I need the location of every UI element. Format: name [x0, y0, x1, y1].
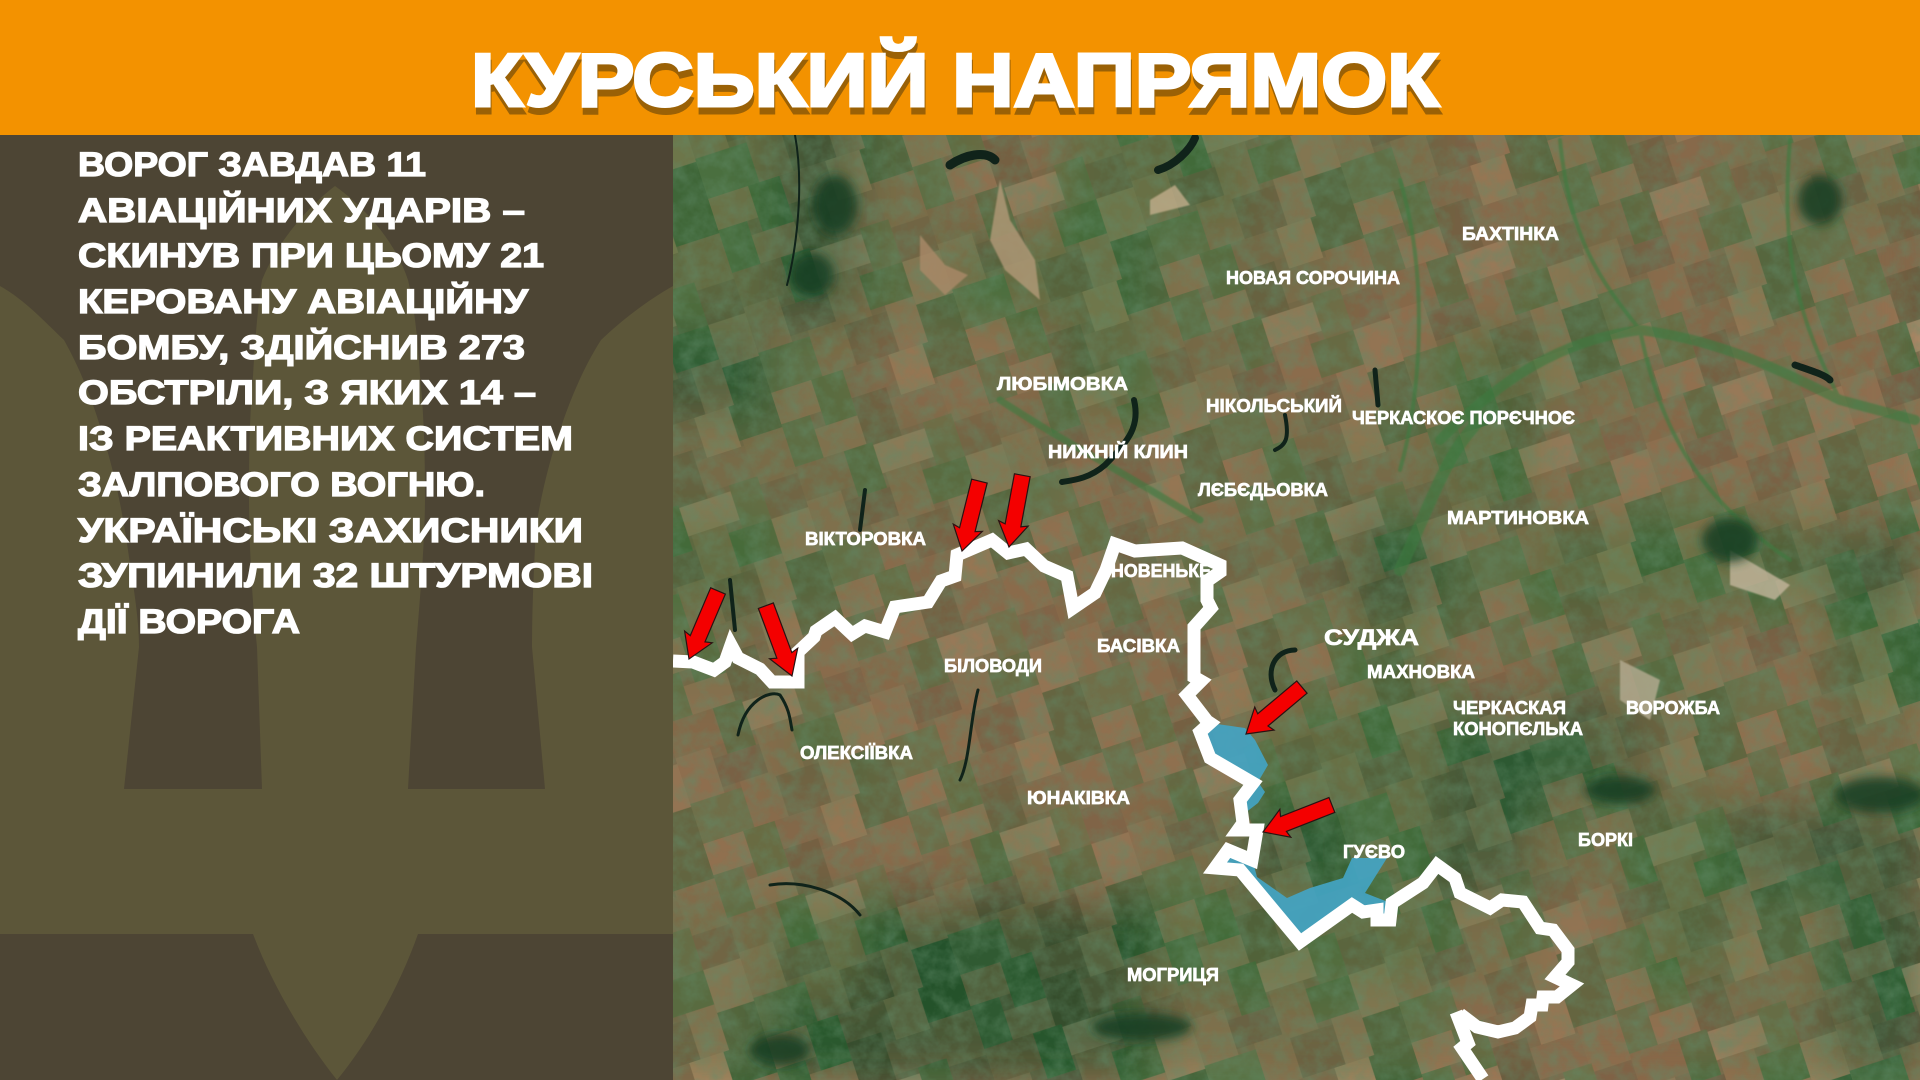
occupied zones (blue)	[1200, 723, 1388, 937]
map colour regions	[673, 135, 1920, 1080]
body text: ЗУПИНИЛИ 32 ШТУРМОВІ	[78, 557, 593, 595]
red arrows	[675, 472, 1337, 846]
map place labels: НОВАЯ СОРОЧИНА	[1226, 268, 1400, 288]
map place labels: БОРКІ	[1578, 830, 1633, 850]
map place labels: КОНОПЄЛЬКА	[1453, 719, 1583, 739]
left text panel with trident emblem	[0, 135, 673, 1080]
map place labels: ОЛЕКСІЇВКА	[800, 743, 913, 763]
arrow 3	[947, 478, 994, 555]
map place labels: НИЖНІЙ КЛИН	[1048, 441, 1188, 462]
map place labels: ГУЄВО	[1343, 842, 1405, 862]
trident emblem	[0, 186, 673, 1080]
map place labels: МАХНОВКА	[1367, 662, 1475, 682]
arrow 1	[675, 585, 732, 665]
map place labels: ВОРОЖБА	[1626, 698, 1720, 718]
map place labels	[800, 224, 1720, 985]
body text: ВОРОГ ЗАВДАВ 11	[78, 146, 426, 184]
map place labels: МОГРИЦЯ	[1127, 965, 1219, 985]
light fields	[920, 180, 1790, 720]
map place labels: БАСІВКА	[1097, 636, 1180, 656]
header bar	[0, 0, 1920, 135]
body text: АВІАЦІЙНИХ УДАРІВ –	[78, 191, 525, 230]
body text: ІЗ РЕАКТИВНИХ СИСТЕМ	[78, 420, 573, 458]
map place labels: НОВЕНЬКЕ	[1111, 561, 1211, 581]
map place labels: ЧЕРКАСКАЯ	[1453, 698, 1566, 718]
title: КУРСЬКИЙ НАПРЯМОК	[471, 38, 1439, 122]
satellite map	[673, 135, 1920, 1080]
body text: УКРАЇНСЬКІ ЗАХИСНИКИ	[78, 512, 583, 550]
map place labels: МАРТИНОВКА	[1447, 508, 1589, 528]
body text: ОБСТРІЛИ, З ЯКИХ 14 –	[78, 374, 536, 412]
title: КУРСЬКИЙ НАПРЯМОК	[472, 45, 1440, 129]
map place labels: СУДЖА	[1324, 625, 1419, 650]
body text: БОМБУ, ЗДІЙСНИВ 273	[78, 328, 525, 367]
body text: СКИНУВ ПРИ ЦЬОМУ 21	[78, 237, 544, 275]
arrow 4	[994, 472, 1037, 550]
map place labels: ЛЮБІМОВКА	[997, 374, 1128, 394]
map place labels: ВІКТОРОВКА	[805, 529, 926, 549]
body text: ДІЇ ВОРОГА	[78, 603, 300, 641]
green river corridors	[1000, 140, 1915, 570]
map place labels: БАХТІНКА	[1462, 224, 1559, 244]
dark forest patches	[750, 175, 1920, 1066]
arrow 6	[1258, 791, 1337, 846]
arrow 2	[752, 600, 806, 681]
map place labels: НІКОЛЬСЬКИЙ	[1206, 395, 1342, 416]
body text	[78, 146, 593, 641]
map place labels: БІЛОВОДИ	[944, 656, 1042, 676]
rivers and ponds	[730, 135, 1830, 915]
vegetation mottling	[673, 135, 1920, 1080]
front line (white border)	[673, 540, 1572, 1079]
map place labels: ЮНАКІВКА	[1027, 788, 1130, 808]
map place labels: ЧЕРКАСКОЄ ПОРЄЧНОЄ	[1352, 408, 1575, 428]
body text: КЕРОВАНУ АВІАЦІЙНУ	[78, 282, 529, 321]
arrow 5	[1236, 676, 1312, 745]
map place labels: ЛЄБЄДЬОВКА	[1198, 480, 1328, 500]
body text: ЗАЛПОВОГО ВОГНЮ.	[78, 466, 485, 504]
